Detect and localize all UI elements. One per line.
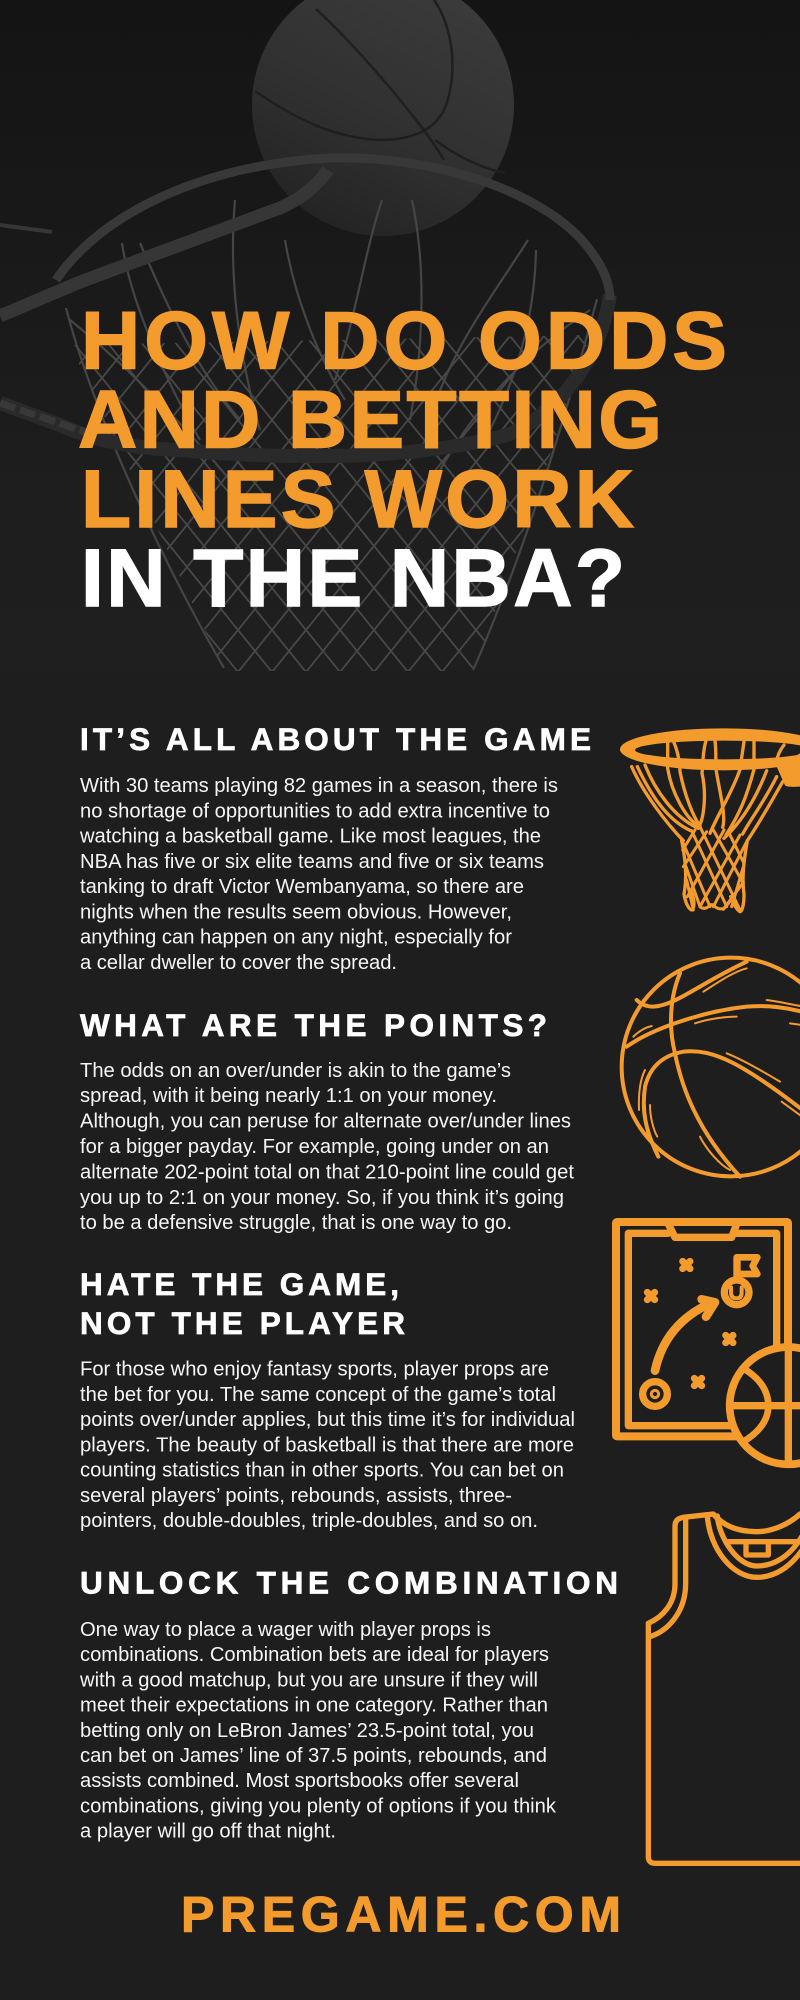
section 4 body (79, 1619, 557, 1843)
title: LINES WORK (81, 454, 634, 545)
icon: jersey (648, 1514, 800, 1863)
section 2 heading: WHAT ARE THE POINTS? (80, 1007, 547, 1043)
section 3 body: counting statistics than in other sports. You can bet on (80, 1460, 564, 1482)
section 1 body: NBA has five or six elite teams and five or six teams (80, 851, 544, 873)
section 4 body: combinations, giving you plenty of options if you think (80, 1795, 557, 1817)
section 1 body: a cellar dweller to cover the spread. (80, 952, 397, 974)
section 1 body: tanking to draft Victor Wembanyama, so there are (80, 876, 524, 898)
hero photo: basketball going through hoop (0, 0, 800, 671)
section 3 body: the bet for you. The same concept of the game’s total (80, 1384, 556, 1406)
title: HOW DO ODDS (81, 296, 727, 387)
section 4 body: can bet on James’ line of 37.5 points, rebounds, and (80, 1745, 547, 1767)
section 4 body: assists combined. Most sportsbooks offer several (80, 1770, 519, 1792)
section 3 body: points over/under applies, but this time it’s for individual (80, 1409, 575, 1431)
section 2 body: spread, with it being nearly 1:1 on your money. (80, 1085, 497, 1107)
section 4 body: betting only on LeBron James’ 23.5-point total, you (80, 1720, 534, 1742)
section 1 body: nights when the results seem obvious. However, (80, 901, 512, 923)
section 1 body: With 30 teams playing 82 games in a season, there is (80, 775, 558, 797)
section 1 body: watching a basketball game. Like most leagues, the (79, 826, 541, 848)
section 3 body (80, 1359, 575, 1532)
section 3 heading (80, 1266, 405, 1341)
section 3 body: For those who enjoy fantasy sports, player props are (80, 1359, 549, 1381)
section 1 body (79, 775, 558, 974)
icon: clipboard play diagram with ball (616, 1222, 800, 1468)
title: AND BETTING (78, 374, 662, 466)
section 1 body: no shortage of opportunities to add extra incentive to (80, 800, 550, 822)
section 3 heading: HATE THE GAME, (80, 1266, 399, 1302)
section 2 body (80, 1060, 574, 1234)
section 2 body: for a bigger payday. For example, going under on an (80, 1136, 549, 1158)
section 3 body: several players’ points, rebounds, assists, three- (80, 1485, 512, 1507)
section 3 body: pointers, double-doubles, triple-doubles, and so on. (80, 1510, 538, 1532)
clipboard outline (616, 1222, 788, 1436)
section 2 body: The odds on an over/under is akin to the game’s (80, 1060, 511, 1082)
section 1 heading: IT’S ALL ABOUT THE GAME (80, 721, 591, 757)
section 1 body: anything can happen on any night, especially for (80, 927, 512, 949)
section 2 body: to be a defensive struggle, that is one way to go. (80, 1212, 512, 1234)
section 3 heading: NOT THE PLAYER (80, 1305, 405, 1341)
section 4 body: with a good matchup, but you are unsure if they will (79, 1669, 538, 1691)
icon: basketball (622, 958, 800, 1177)
section 2 body: alternate 202-point total on that 210-point line could get (80, 1161, 574, 1183)
section 3 body: players. The beauty of basketball is that there are more (80, 1434, 574, 1456)
section 2 body: Although, you can peruse for alternate over/under lines (80, 1111, 571, 1133)
title: IN THE NBA? (81, 533, 625, 624)
footer brand: PREGAME.COM (181, 1887, 621, 1943)
section 4 heading: UNLOCK THE COMBINATION (80, 1564, 618, 1600)
section 4 body: a player will go off that night. (80, 1821, 336, 1843)
section 4 body: combinations. Combination bets are ideal for players (80, 1644, 549, 1666)
section 2 body: you up to 2:1 on your money. So, if you think it’s going (80, 1187, 564, 1209)
title (78, 296, 727, 624)
section 4 body: meet their expectations in one category. Rather than (80, 1695, 548, 1717)
section 4 body: One way to place a wager with player props is (80, 1619, 491, 1641)
icon: hoop and net (620, 728, 800, 912)
